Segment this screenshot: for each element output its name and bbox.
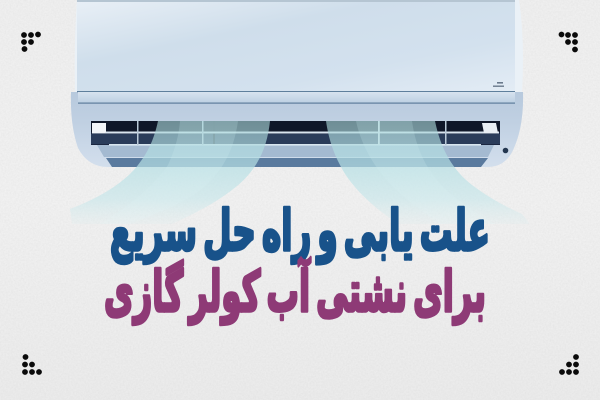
icon: corner dots bottom right [559,354,579,375]
right louver end cap [482,123,498,133]
air flow left [70,121,270,224]
icon: corner dots bottom left [22,354,42,375]
air flow right [326,121,530,224]
right side button [503,148,508,153]
icon: corner dots top left [21,32,41,52]
left louver end cap [92,123,106,133]
front panel [75,0,523,92]
unit lower body [71,92,523,167]
brand mark [493,82,504,87]
icon: corner dots top right [559,32,578,52]
air conditioner unit [71,0,523,167]
vent opening [91,121,500,167]
vent louver bars [92,121,499,146]
panel lip [78,92,515,103]
